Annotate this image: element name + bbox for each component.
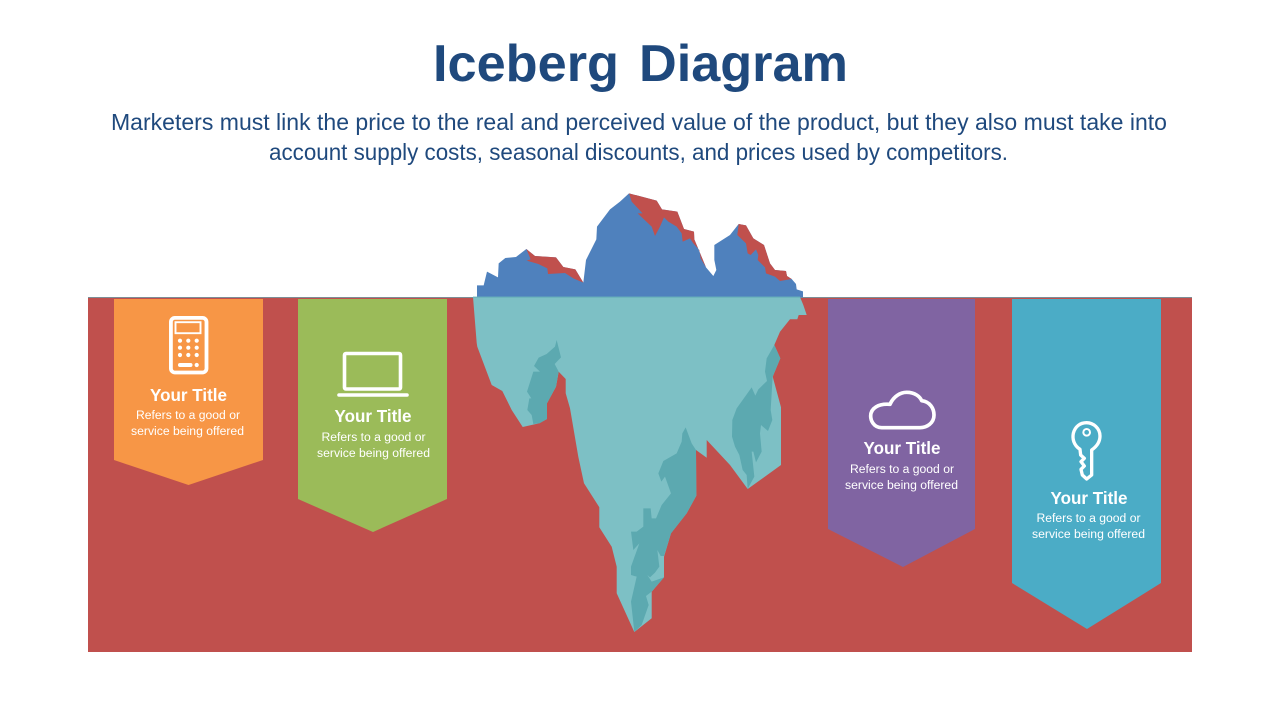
- water background: [88, 297, 1192, 652]
- panel: teal banner: [1012, 299, 1161, 629]
- banner shape: [1012, 299, 1161, 629]
- icon: laptop: [339, 354, 407, 395]
- panel text: [317, 432, 430, 460]
- panel: purple banner: [828, 299, 975, 567]
- panel heading: Your Title: [1050, 488, 1128, 508]
- subtitle text: Marketers must link the price to the real and perceived value of the product, but they also must take into: [111, 109, 1167, 135]
- panel text: Refers to a good or: [322, 432, 426, 444]
- subtitle text: [111, 109, 1167, 165]
- surface line: [88, 297, 1192, 298]
- panel text: Refers to a good or: [850, 464, 954, 476]
- panel: orange banner: [114, 299, 263, 485]
- iceberg below water: [473, 297, 807, 632]
- icon: calculator: [171, 318, 206, 372]
- panel text: Refers to a good or: [136, 410, 240, 422]
- panel text: service being offered: [317, 448, 430, 460]
- iceberg shadow: bottom: [631, 427, 696, 632]
- banner shape: [298, 299, 447, 532]
- panel heading: Your Title: [334, 406, 412, 426]
- panel text: service being offered: [845, 480, 958, 492]
- panel text: service being offered: [131, 426, 244, 438]
- panel text: [845, 464, 958, 492]
- icon: key: [1073, 423, 1100, 479]
- banner shape: [114, 299, 263, 485]
- iceberg diagram: [473, 193, 807, 632]
- iceberg shadow: right: [732, 345, 780, 489]
- subtitle text: account supply costs, seasonal discounts, and prices used by competitors.: [269, 139, 1008, 165]
- waterline: [473, 297, 800, 298]
- title: Iceberg: [433, 35, 619, 93]
- iceberg above water: [477, 193, 803, 297]
- iceberg shadow: left: [527, 340, 561, 424]
- panel text: [1032, 513, 1145, 541]
- panel: green banner: [298, 299, 447, 532]
- panel text: Refers to a good or: [1036, 513, 1141, 525]
- icon: cloud: [871, 392, 934, 428]
- panel heading: Your Title: [864, 438, 941, 458]
- title: Diagram: [639, 35, 848, 93]
- banner shape: [828, 299, 975, 567]
- panel text: [131, 410, 244, 438]
- panel heading: Your Title: [150, 385, 227, 405]
- panel text: service being offered: [1032, 529, 1145, 541]
